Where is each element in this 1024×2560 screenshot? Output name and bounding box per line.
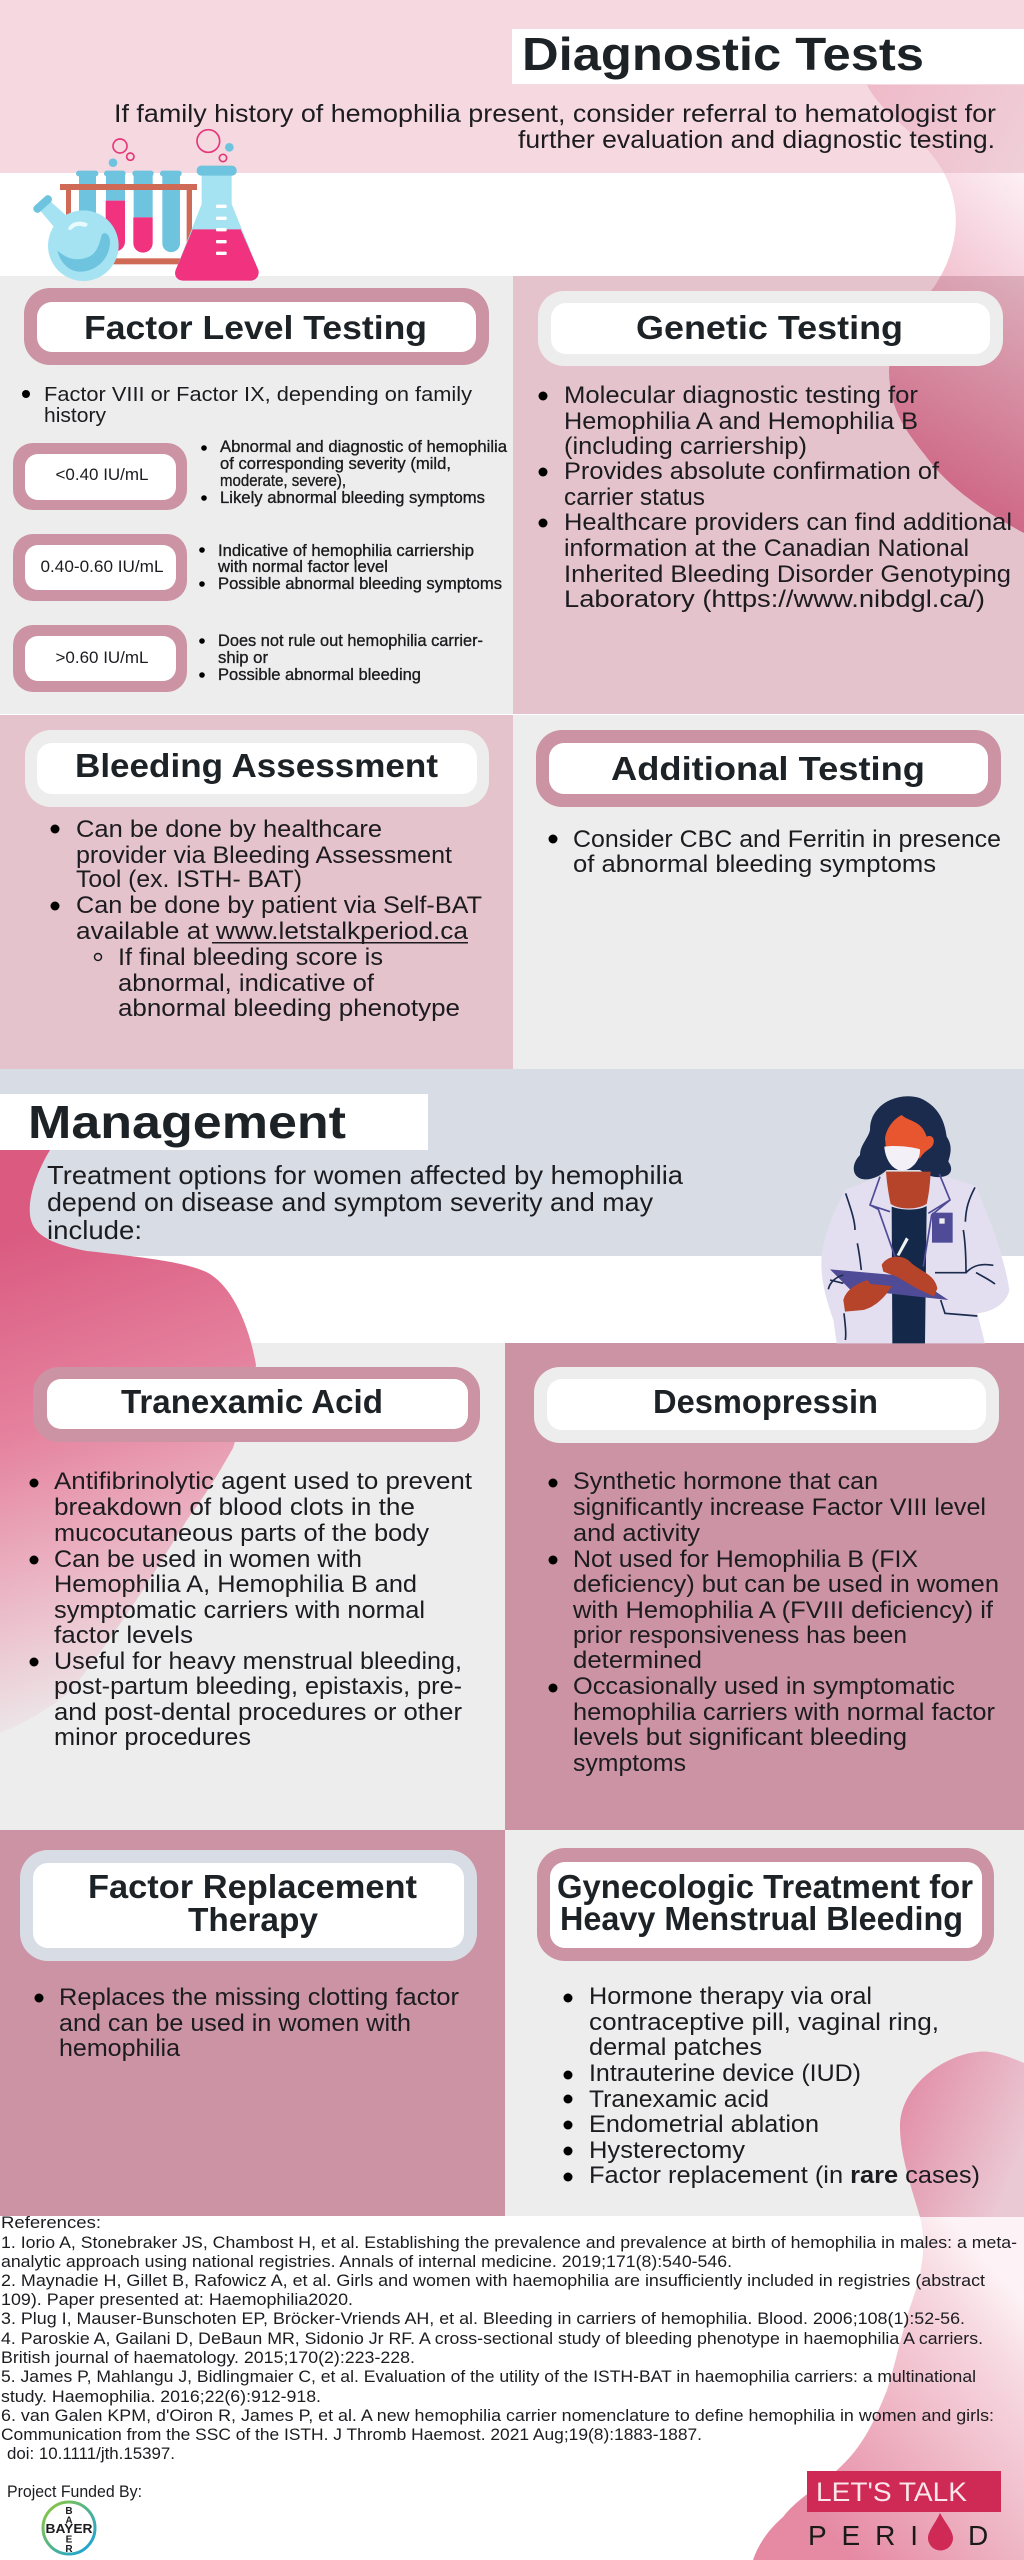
panel background: gynecologic treatment [505,1830,1024,2216]
factor level pill: 0.40 to 0.60: 0.40-0.60 IU/mL [40,557,164,576]
heading: Factor Replacement Therapy [20,1850,477,1961]
references: References: [1,2214,101,2232]
description: below 0.40: moderate, severe), [220,472,346,490]
description: 0.40 to 0.60 [199,542,502,593]
bullet list: factor replacement: hemophilia [59,2035,181,2062]
bullet list: desmopressin: significantly increase Factor VIII level [573,1494,986,1521]
bullet list: gynecologic treatment: Factor replacement (in rare cases) [589,2162,980,2189]
heading: Genetic Testing: Genetic Testing [636,309,903,346]
references: doi: 10.1111/jth.15397. [7,2445,175,2463]
bullet list: bleeding assessment: abnormal bleeding phenotype [118,995,460,1022]
bullet list: gynecologic treatment: Endometrial ablation [589,2111,819,2138]
diagnostic header band [0,0,1024,173]
bullet list: desmopressin: and activity [573,1520,700,1547]
references [1,2214,1017,2463]
bullet text: factor VIII or IX: history [44,404,107,427]
heading: Factor Level Testing: Factor Level Testing [84,309,427,346]
management header band [0,1069,1024,1256]
panel: tranexamic acid [30,1367,480,1751]
heading: Tranexamic Acid [33,1367,480,1442]
decorative blob: top right [860,85,1024,536]
bullet list: genetic testing: carrier status [564,484,705,511]
intro text: management: include: [47,1215,142,1245]
bullet list: gynecologic treatment: dermal patches [589,2034,762,2061]
intro text: diagnostic tests [114,100,996,154]
intro text: management: depend on disease and symptom severity and may [47,1187,653,1217]
references: 5. James P, Mahlangu J, Bidlingmaier C, et al. Evaluation of the utility of the ISTH-BAT in haemophilia carriers: a multinational [1,2368,976,2386]
panel: factor replacement therapy [20,1850,477,2062]
heading: Desmopressin [534,1367,999,1443]
heading: Genetic Testing [538,291,1003,366]
panel: genetic testing [538,291,1012,613]
description: above 0.60: Does not rule out hemophilia carrier- [218,632,483,650]
description: above 0.60: ship or [218,649,269,667]
description: below 0.40 [201,438,508,507]
title: Management [0,1094,428,1150]
bullet list: bleeding assessment: provider via Bleeding Assessment [76,842,452,869]
heading: Factor Replacement Therapy: Therapy [188,1901,319,1938]
bullet list: desmopressin [548,1468,999,1777]
bullet list: tranexamic acid: Useful for heavy menstrual bleeding, [54,1648,462,1675]
bullet list: genetic testing: Healthcare providers can find additional [564,509,1012,536]
bullet list: bleeding assessment: available at www.letstalkperiod.ca [76,918,469,945]
intro text: diagnostic tests: further evaluation and diagnostic testing. [518,126,995,154]
description: below 0.40: of corresponding severity (mild, [220,455,451,473]
bullet list: genetic testing: Hemophilia A and Hemophilia B [564,408,918,435]
description: below 0.40: Likely abnormal bleeding symptoms [220,489,485,507]
bullet text: factor VIII or IX: Factor VIII or Factor IX, depending on family [44,383,473,406]
references: 4. Paroskie A, Gailani D, DeBaun MR, Sidonio Jr RF. A cross-sectional study of bleeding phenotype in haemophilia A carriers. [1,2330,983,2348]
description: 0.40 to 0.60: with normal factor level [217,558,388,576]
bullet list: tranexamic acid: post-partum bleeding, epistaxis, pre- [54,1673,462,1700]
heading: Gynecologic Treatment for Heavy Menstrual Bleeding: Heavy Menstrual Bleeding [560,1900,963,1937]
panel: desmopressin [534,1367,999,1777]
bullet list: desmopressin: hemophilia carriers with normal factor [573,1699,995,1726]
logo: Bayer: BAYER [46,2522,92,2536]
bullet list: genetic testing: (including carriership) [564,433,807,460]
bullet list: bleeding assessment: Tool (ex. ISTH- BAT) [76,866,302,893]
illustration: doctor with mask and clipboard [821,1096,1009,1343]
heading: Additional Testing: Additional Testing [611,750,925,787]
bullet list: genetic testing [538,382,1012,613]
decorative blob: left of management [0,1150,256,1733]
bullet list: tranexamic acid: Antifibrinolytic agent used to prevent [54,1468,472,1495]
references: analytic approach using national registries. Annals of internal medicine. 2019;171(8):540-546. [1,2253,732,2271]
panel background: genetic testing [513,276,1024,714]
description: 0.40 to 0.60: Indicative of hemophilia carriership [218,542,474,560]
heading: Additional Testing [536,730,1001,807]
panel background: bleeding assessment [0,715,513,1069]
logo: Let's Talk Period: PERI [808,2520,918,2551]
panel background: desmopressin [505,1343,1024,1830]
icon: lab flasks and test tubes [32,130,259,281]
bullet list: genetic testing: information at the Canadian National [564,535,969,562]
description: 0.40 to 0.60: Possible abnormal bleeding symptoms [218,575,502,593]
bullet list: gynecologic treatment: Hysterectomy [589,2137,745,2164]
references: 3. Plug I, Mauser-Bunschoten EP, Bröcker-Vriends AH, et al. Bleeding in carriers of hemophilia. Blood. 2006;108(1):52-56. [1,2310,965,2328]
references: 109). Paper presented at: Haemophilia2020. [1,2291,353,2309]
funding credit text: Project Funded By: [7,2483,142,2501]
references: Communication from the SSC of the ISTH. J Thromb Haemost. 2021 Aug;19(8):1883-1887. [1,2426,702,2444]
bullet list: genetic testing: Molecular diagnostic testing for [564,382,918,409]
heading: Factor Replacement Therapy: Factor Replacement [88,1868,417,1905]
bullet list: bleeding assessment: If final bleeding score is [118,944,383,971]
bullet list: tranexamic acid: breakdown of blood clots in the [54,1494,415,1521]
bullet list: tranexamic acid: and post-dental procedures or other [54,1699,462,1726]
logo: Bayer: B [65,2506,73,2517]
bullet list: desmopressin: with Hemophilia A (FVIII deficiency) if [572,1597,993,1624]
bullet list: gynecologic treatment: Intrauterine device (IUD) [589,2060,861,2087]
bullet list: bleeding assessment: abnormal, indicative of [118,970,374,997]
bullet list: factor replacement [34,1984,459,2062]
bullet list: genetic testing: Laboratory (https://www.nibdgl.ca/) [564,586,985,613]
bullet list: bleeding assessment [50,816,482,1022]
bullet list: gynecologic treatment: contraceptive pill, vaginal ring, [589,2009,939,2036]
panel background: tranexamic acid [0,1343,505,1830]
bullet list: genetic testing: Inherited Bleeding Disorder Genotyping [564,561,1011,588]
heading: Gynecologic Treatment for Heavy Menstrual Bleeding [537,1848,994,1961]
factor level pill: below 0.40 [13,443,187,510]
heading: Bleeding Assessment: Bleeding Assessment [75,747,438,784]
heading: Factor Level Testing [24,288,489,365]
logo: Bayer: E [66,2534,73,2546]
bullet list: tranexamic acid: symptomatic carriers with normal [54,1597,425,1624]
logo: Let's Talk Period: LET'S TALK [816,2477,967,2507]
panel: gynecologic treatment [537,1848,994,2189]
bullet list: tranexamic acid [30,1468,472,1751]
logo: Let's Talk Period [807,2471,1001,2551]
factor level pill: above 0.60: >0.60 IU/mL [56,648,148,667]
bullet list: gynecologic treatment: Tranexamic acid [589,2086,769,2113]
bullet list: tranexamic acid: minor procedures [54,1724,251,1751]
panel background: additional testing [513,715,1024,1069]
description: below 0.40: Abnormal and diagnostic of hemophilia [220,438,508,456]
bullet list: desmopressin: deficiency) but can be used in women [573,1571,999,1598]
bullet text: factor VIII or IX [22,383,473,427]
heading: Gynecologic Treatment for Heavy Menstrual Bleeding: Gynecologic Treatment for [557,1868,973,1905]
description: above 0.60: Possible abnormal bleeding [218,666,421,684]
bullet list: factor replacement: and can be used in women with [59,2010,411,2037]
bullet list: desmopressin: Synthetic hormone that can [573,1468,878,1495]
bullet list: additional testing [548,826,1001,878]
panel background: factor replacement therapy [0,1830,505,2216]
logo: Bayer [43,2502,95,2555]
bullet list: desmopressin: Occasionally used in symptomatic [573,1673,955,1700]
references: 6. van Galen KPM, d'Oiron R, James P, et al. A new hemophilia carrier nomenclature to define hemophilia in women and girls: [1,2407,994,2425]
bullet list: desmopressin: levels but significant bleeding [573,1724,907,1751]
heading: Desmopressin: Desmopressin [653,1383,878,1420]
bullet list: factor replacement: Replaces the missing clotting factor [59,1984,459,2011]
panel: factor level testing [13,288,508,692]
factor level pill: below 0.40: <0.40 IU/mL [56,465,148,484]
title: Diagnostic Tests [512,28,1024,84]
bullet list: gynecologic treatment [564,1983,980,2189]
bullet list: bleeding assessment: Can be done by patient via Self-BAT [76,892,482,919]
bullet list: additional testing: of abnormal bleeding symptoms [573,851,936,878]
bullet list: tranexamic acid: factor levels [54,1622,193,1649]
references: British journal of haematology. 2015;170(2):223-228. [1,2349,415,2367]
bullet list: bleeding assessment: Can be done by healthcare [76,816,382,843]
bullet list: tranexamic acid: Hemophilia A, Hemophilia B and [54,1571,417,1598]
description: above 0.60 [199,632,483,684]
logo: Let's Talk Period: D [968,2520,988,2551]
bullet list: genetic testing: Provides absolute confirmation of [564,458,939,485]
heading: Bleeding Assessment [25,730,489,807]
bullet list: desmopressin: symptoms [573,1750,686,1777]
decorative blob: bottom right [750,2050,1024,2560]
heading: Tranexamic Acid: Tranexamic Acid [121,1383,383,1420]
factor level pill: 0.40 to 0.60 [13,534,187,601]
intro text: management: Treatment options for women affected by hemophilia [47,1160,684,1190]
title: Diagnostic Tests: Diagnostic Tests [522,28,924,80]
panel background: factor level testing [0,276,513,714]
logo: Bayer: R [65,2544,73,2555]
references: 1. Iorio A, Stonebraker JS, Chambost H, et al. Establishing the prevalence and prevalence at birth of hemophilia in males: a meta- [1,2234,1017,2252]
bullet list: tranexamic acid: mucocutaneous parts of the body [54,1520,429,1547]
references: 2. Maynadie H, Gillet B, Rafowicz A, et al. Girls and women with haemophilia are insufficiently included in registries (abstract [1,2272,985,2290]
bullet list: additional testing: Consider CBC and Ferritin in presence [573,826,1001,853]
panel: bleeding assessment [25,730,489,1022]
panel: additional testing [536,730,1001,878]
bullet list: gynecologic treatment: Hormone therapy via oral [589,1983,872,2010]
references: study. Haemophilia. 2016;22(6):912-918. [1,2388,321,2406]
bullet list: desmopressin: prior responsiveness has been [573,1622,907,1649]
bullet list: tranexamic acid: Can be used in women with [54,1546,362,1573]
intro text: management [47,1160,684,1245]
bullet list: desmopressin: determined [573,1647,702,1674]
intro text: diagnostic tests: If family history of hemophilia present, consider referral to hematologist for [114,100,996,128]
logo: Bayer: A [65,2516,73,2526]
title: Management: Management [28,1096,346,1148]
bullet list: desmopressin: Not used for Hemophilia B (FIX [573,1546,918,1573]
factor level pill: above 0.60 [13,625,187,692]
